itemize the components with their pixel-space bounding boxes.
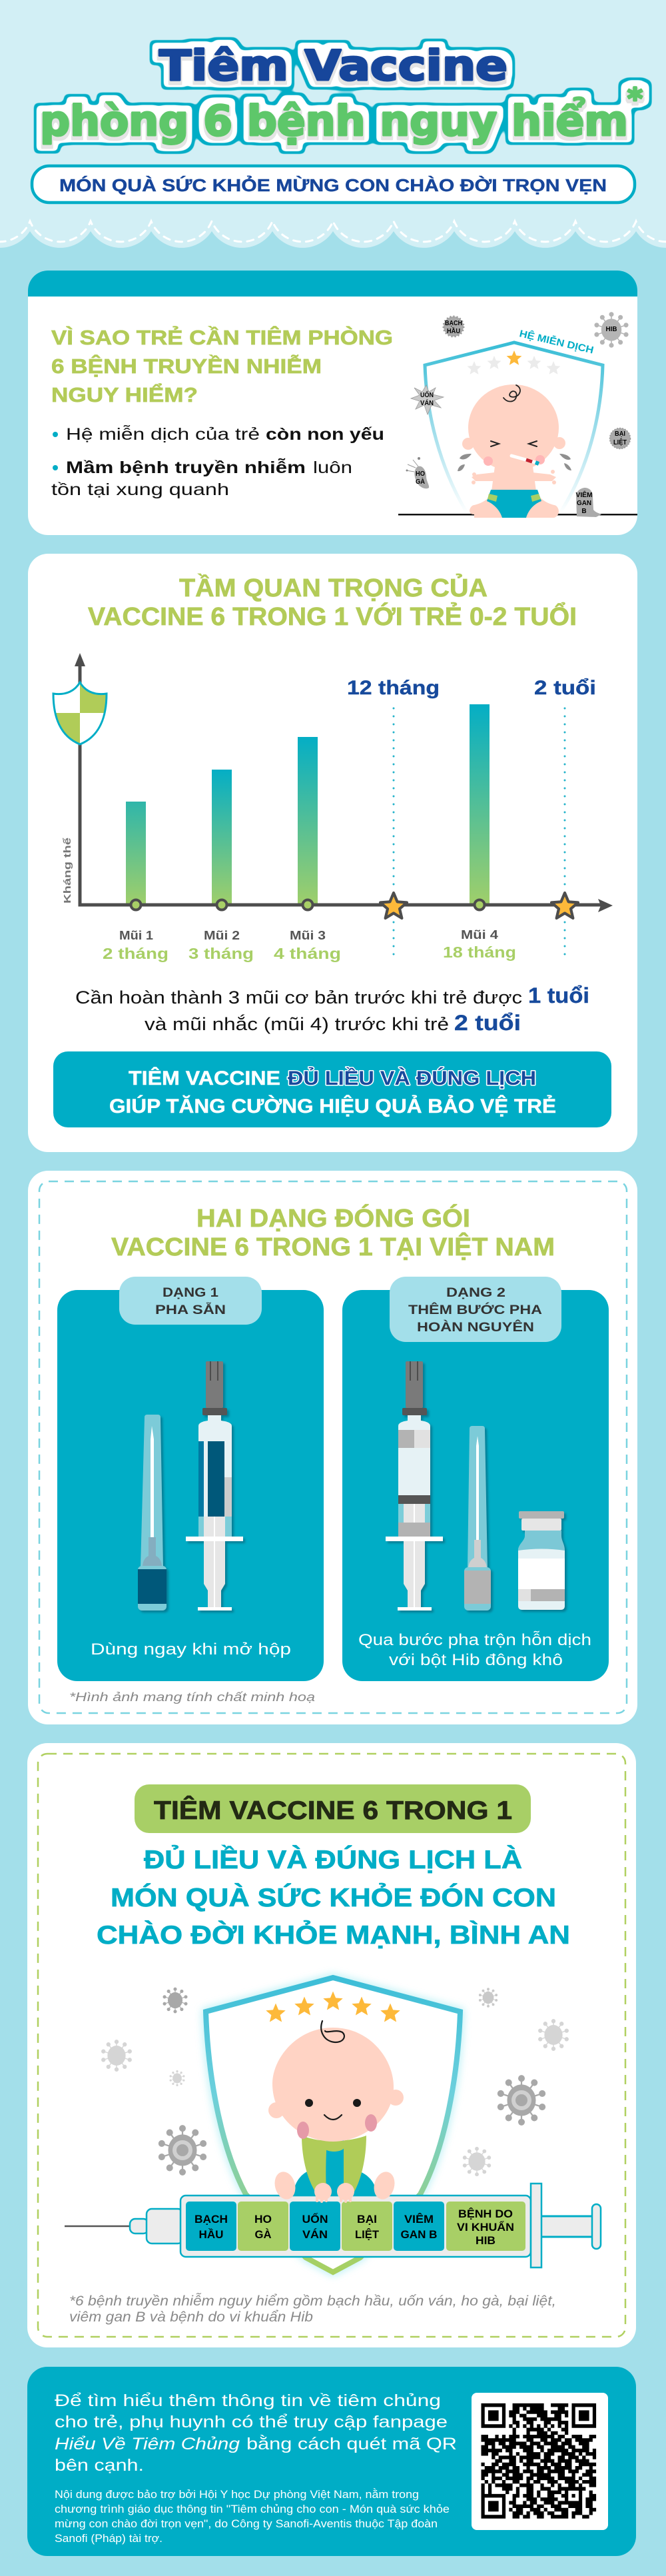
cell: ho gà: GÀ bbox=[254, 2228, 272, 2241]
dose markers bbox=[131, 900, 485, 910]
germ: hib: HIB bbox=[606, 326, 617, 333]
schedule note: và mũi nhắc (mũi 4) trước khi trẻ bbox=[145, 1013, 449, 1034]
milestone stars bbox=[380, 893, 578, 918]
germ: bại liệt: BẠI bbox=[615, 430, 625, 438]
bullet list: Mầm bệnh truyền nhiễm bbox=[66, 457, 306, 477]
panel: footer information bbox=[27, 2367, 636, 2556]
caption: form 2: Qua bước pha trộn hỗn dịch bbox=[358, 1631, 591, 1649]
panel: two packaging forms bbox=[28, 1171, 637, 1724]
illustration: crying baby inside weak shield bbox=[398, 313, 637, 518]
heading: gift message bbox=[97, 1845, 570, 1950]
subtitle pill: MÓN QUÀ SỨC KHỎE MỪNG CON CHÀO ĐỜI TRỌN VẸN bbox=[59, 175, 607, 195]
title: phòng 6 bệnh nguy hiểm bbox=[40, 97, 628, 145]
stars on shield bbox=[266, 1991, 400, 2022]
milestone labels bbox=[347, 677, 596, 699]
cell: uốn ván bbox=[290, 2202, 340, 2251]
axis label: Kháng thể bbox=[62, 838, 73, 904]
panel: gift of health bbox=[27, 1743, 636, 2347]
cell: viêm gan B bbox=[394, 2202, 444, 2251]
text: learn more: cho trẻ, phụ huynh có thể truy cập fanpage bbox=[55, 2413, 448, 2431]
heading: importance: TẦM QUAN TRỌNG CỦA bbox=[179, 573, 488, 602]
subtitle pill bbox=[32, 166, 635, 203]
germ: bại liệt bbox=[610, 428, 630, 449]
shield: protective bbox=[206, 1978, 460, 2272]
schedule note: Cần hoàn thành 3 mũi cơ bản trước khi trẻ được bbox=[75, 987, 522, 1007]
cell: bại liệt: LIỆT bbox=[355, 2228, 380, 2241]
cell: bại liệt: BẠI bbox=[357, 2213, 377, 2226]
cell: Hib: VI KHUẨN bbox=[457, 2221, 514, 2234]
text: learn more: Để tìm hiểu thêm thông tin về tiêm chủng bbox=[55, 2391, 441, 2410]
germ: bạch hầu: BẠCH bbox=[445, 320, 462, 327]
illustration: crying baby inside weak shield: HỆ MIỄN DỊCH bbox=[518, 327, 595, 356]
heading: importance bbox=[88, 573, 577, 631]
bullet list: luôn bbox=[313, 458, 352, 477]
footnote: six diseases: viêm gan B và bệnh do vi khuẩn Hib bbox=[69, 2309, 313, 2325]
milestone labels: 12 tháng bbox=[347, 677, 440, 699]
heading: why bbox=[51, 325, 393, 406]
card: form 2 reconstituted bbox=[342, 1277, 609, 1681]
caption: form 1: Dùng ngay khi mở hộp bbox=[91, 1640, 291, 1658]
badge: vaccine 6 in 1: TIÊM VACCINE 6 TRONG 1 bbox=[154, 1796, 512, 1825]
dose labels: 3 tháng bbox=[188, 945, 254, 962]
text: learn more bbox=[55, 2391, 457, 2475]
tab: form 2: DẠNG 2 bbox=[446, 1286, 505, 1300]
dose labels: Mũi 1 bbox=[119, 929, 153, 942]
cell: Hib: HIB bbox=[476, 2234, 496, 2247]
tab: form 2 bbox=[390, 1277, 561, 1342]
header background with scalloped edge bbox=[0, 0, 666, 267]
icon: needle with grey cap bbox=[464, 1426, 491, 1610]
cell: ho gà: HO bbox=[254, 2213, 272, 2226]
dose labels: 2 tháng bbox=[103, 945, 168, 962]
germ: viêm gan B bbox=[575, 488, 601, 517]
germ: bạch hầu: HẦU bbox=[447, 326, 460, 335]
footnote: six diseases bbox=[69, 2293, 556, 2325]
tab: form 1: DẠNG 1 bbox=[163, 1286, 218, 1300]
dose labels: Mũi 4 bbox=[461, 928, 498, 942]
germs around shield bbox=[102, 1988, 568, 2176]
germ: viêm gan B: B bbox=[581, 508, 587, 515]
cell: Hib: BỆNH DO bbox=[458, 2208, 513, 2220]
syringe: six diseases bbox=[65, 2184, 601, 2267]
heading: gift message: MÓN QUÀ SỨC KHỎE ĐÓN CON bbox=[111, 1883, 556, 1912]
dose labels bbox=[103, 928, 516, 962]
germ: uốn ván: VÁN bbox=[420, 398, 434, 407]
tab: form 2: HOÀN NGUYÊN bbox=[417, 1320, 534, 1335]
cell: Hib bbox=[446, 2202, 525, 2251]
germ: viêm gan B: GAN bbox=[577, 500, 591, 507]
germ: ho gà bbox=[406, 457, 429, 488]
bullet list: Hệ miễn dịch của trẻ bbox=[66, 424, 260, 444]
heading: why: NGUY HIỂM? bbox=[51, 383, 198, 406]
icon: needle with dark cap bbox=[138, 1415, 166, 1610]
caption: form 2: với bột Hib đông khô bbox=[389, 1651, 563, 1669]
tab: form 2: THÊM BƯỚC PHA bbox=[408, 1303, 542, 1317]
germ: bạch hầu bbox=[444, 317, 464, 336]
heading: gift message: ĐỦ LIỀU VÀ ĐÚNG LỊCH LÀ bbox=[144, 1845, 522, 1874]
footnote: six diseases: *6 bệnh truyền nhiễm nguy hiểm gồm bạch hầu, uốn ván, ho gà, bại liệt, bbox=[69, 2293, 556, 2309]
text: sponsor note: Sanofi (Pháp) tài trợ. bbox=[55, 2532, 163, 2545]
bullet list bbox=[51, 424, 384, 499]
germ: ho gà: HO bbox=[416, 470, 425, 478]
schedule note: 1 tuổi bbox=[528, 983, 589, 1007]
panel: why vaccinate bbox=[28, 271, 637, 535]
dose labels: Mũi 2 bbox=[204, 929, 240, 942]
tab: form 1 bbox=[119, 1277, 262, 1325]
bullet list: tồn tại xung quanh bbox=[51, 480, 229, 499]
text: learn more: Hiểu Về Tiêm Chủng bbox=[55, 2435, 240, 2453]
germ: hib bbox=[595, 313, 628, 347]
heading: why: 6 BỆNH TRUYỀN NHIỄM bbox=[51, 354, 322, 378]
heading: why: VÌ SAO TRẺ CẦN TIÊM PHÒNG bbox=[51, 325, 393, 349]
text: sponsor note: chương trình giáo dục thông tin "Tiêm chủng cho con - Món quà sức khỏe bbox=[55, 2503, 450, 2515]
text: sponsor note: Nội dung được bảo trợ bởi Hội Y học Dự phòng Việt Nam, nằm trong bbox=[55, 2488, 419, 2501]
germ: uốn ván bbox=[411, 385, 444, 414]
cell: uốn ván: VÁN bbox=[302, 2228, 328, 2241]
milestone labels: 2 tuổi bbox=[534, 677, 596, 699]
axes bbox=[75, 653, 613, 912]
heading: packaging: HAI DẠNG ĐÓNG GÓI bbox=[196, 1203, 470, 1233]
schedule note: 2 tuổi bbox=[454, 1011, 521, 1035]
germ: ringed large left bbox=[159, 2126, 206, 2175]
schedule note bbox=[75, 983, 589, 1035]
icon: shield on axis bbox=[53, 682, 107, 744]
bars bbox=[126, 704, 490, 905]
callout: on schedule bbox=[53, 1051, 611, 1127]
tab: form 1: PHA SẴN bbox=[155, 1303, 226, 1317]
cell: ho gà bbox=[238, 2202, 288, 2251]
text: learn more: bên cạnh. bbox=[55, 2456, 144, 2475]
text: sponsor note: mừng con chào đời trọn vẹn", do Công ty Sanofi-Aventis thuộc Tập đoàn bbox=[55, 2517, 438, 2530]
germ: uốn ván: UỐN bbox=[420, 390, 434, 399]
callout: on schedule: TIÊM VACCINE bbox=[129, 1067, 280, 1089]
icon: vial of Hib powder bbox=[518, 1511, 565, 1610]
panel: importance of the vaccine bbox=[28, 554, 637, 1152]
callout: on schedule: ĐỦ LIỀU VÀ ĐÚNG LỊCH bbox=[288, 1067, 536, 1089]
icon: prefilled syringe bbox=[186, 1361, 243, 1610]
note: illustration disclaimer: *Hình ảnh mang tính chất minh hoạ bbox=[69, 1690, 315, 1704]
cell: viêm gan B: GAN B bbox=[401, 2228, 437, 2241]
baby bbox=[458, 384, 571, 518]
callout: on schedule: GIÚP TĂNG CƯỜNG HIỆU QUẢ BẢO VỆ TRẺ bbox=[109, 1095, 556, 1117]
germ: bại liệt: LIỆT bbox=[613, 438, 627, 446]
cell: bạch hầu: BẠCH bbox=[194, 2213, 228, 2226]
dose labels: 4 tháng bbox=[274, 945, 341, 962]
heading: packaging: VACCINE 6 TRONG 1 TẠI VIỆT NAM bbox=[111, 1232, 555, 1261]
cell: bạch hầu bbox=[186, 2202, 236, 2251]
card: form 1 ready mixed bbox=[57, 1277, 324, 1681]
dose labels: Mũi 3 bbox=[290, 929, 326, 942]
cell: bại liệt bbox=[342, 2202, 392, 2251]
icon: syringe with suspension bbox=[386, 1361, 443, 1610]
text: sponsor note bbox=[55, 2488, 450, 2545]
title: * bbox=[627, 82, 643, 116]
heading: importance: VACCINE 6 TRONG 1 VỚI TRẺ 0-2 TUỔI bbox=[88, 601, 577, 631]
cell: bạch hầu: HẦU bbox=[198, 2228, 224, 2241]
cell: uốn ván: UỐN bbox=[302, 2212, 328, 2226]
cell: viêm gan B: VIÊM bbox=[404, 2213, 434, 2226]
title: Tiêm Vaccine bbox=[159, 41, 507, 90]
germ: ho gà: GÀ bbox=[416, 477, 425, 486]
bar chart: antibody level bbox=[53, 653, 613, 962]
caption: form 2 bbox=[358, 1631, 591, 1669]
title bbox=[40, 41, 643, 145]
bullet list: còn non yếu bbox=[266, 425, 384, 444]
germ: viêm gan B: VIÊM bbox=[575, 490, 593, 499]
heading: packaging bbox=[111, 1203, 555, 1261]
baby: healthy and smiling bbox=[268, 2021, 404, 2202]
heading: gift message: CHÀO ĐỜI KHỎE MẠNH, BÌNH AN bbox=[97, 1920, 570, 1950]
dose labels: 18 tháng bbox=[443, 944, 516, 961]
badge: vaccine 6 in 1 bbox=[135, 1784, 531, 1833]
germ: ringed large right bbox=[498, 2076, 545, 2125]
text: learn more: bằng cách quét mã QR bbox=[246, 2434, 457, 2453]
QR code bbox=[472, 2393, 608, 2530]
